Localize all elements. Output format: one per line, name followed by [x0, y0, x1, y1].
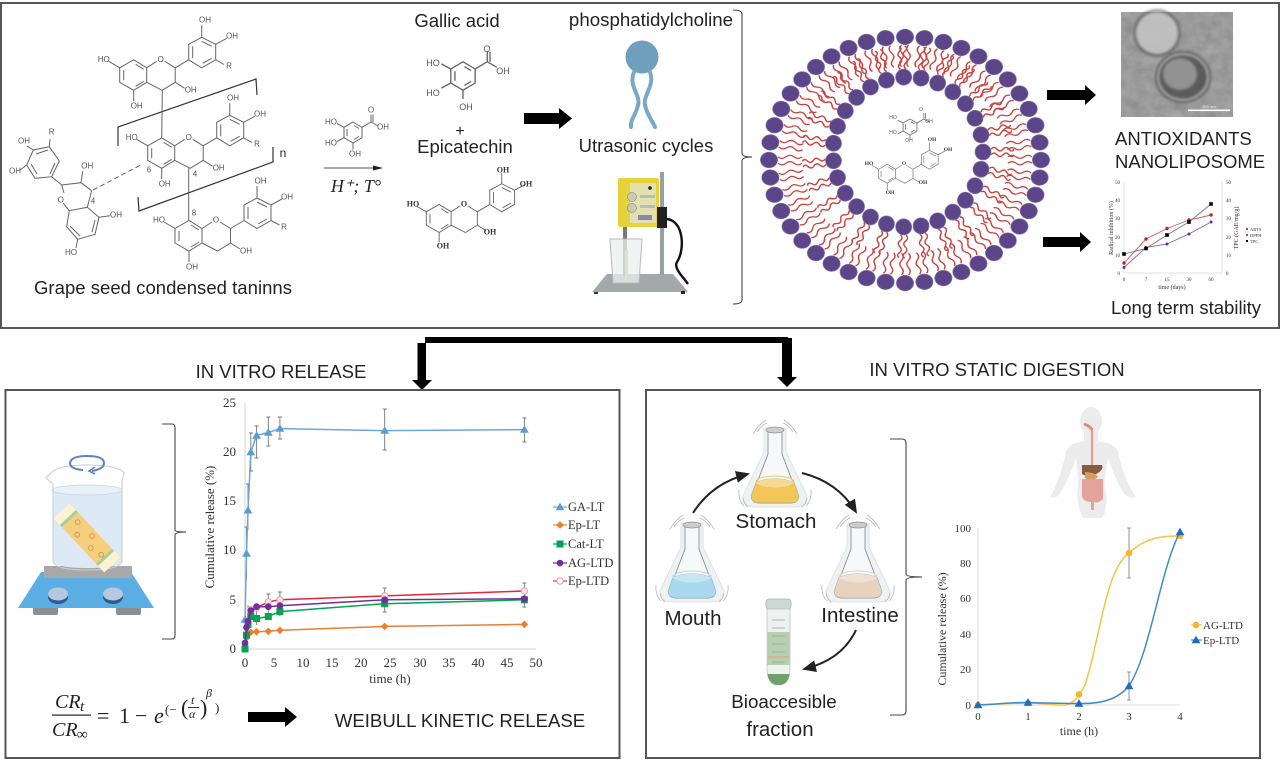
- outer phospholipid layer: [760, 29, 1050, 291]
- flavan unit bottom: OH: [186, 262, 198, 272]
- small gallic acid: HO: [325, 138, 337, 148]
- formula: Weibull equation: ): [215, 700, 219, 715]
- label: bioaccessible fraction: Bioaccesible: [731, 691, 837, 712]
- arrow: to Weibull kinetic: [248, 707, 297, 727]
- formula: Weibull equation: CR: [52, 719, 78, 741]
- small gallic acid: HO: [325, 118, 337, 126]
- legend: DPPH: [1250, 233, 1262, 238]
- flavan unit middle: OH: [227, 94, 239, 102]
- x axis labels: 25: [384, 655, 396, 670]
- flavan unit left: OH: [81, 162, 94, 170]
- structure: epicatechin: HO: [407, 200, 419, 208]
- y axis labels: 5: [230, 592, 236, 607]
- flavan unit middle: OH: [254, 110, 266, 118]
- right axis ticks: 30: [1226, 217, 1232, 222]
- formula: Weibull equation: CR: [55, 691, 81, 713]
- right axis ticks: [1226, 181, 1232, 277]
- chart: cumulative release: [202, 395, 613, 686]
- axis titles: time (h): [369, 671, 411, 686]
- formula: Weibull equation: e: [154, 703, 164, 728]
- encapsulated epicatechin: OH: [944, 147, 953, 153]
- axis titles: Cumulative release (%): [935, 572, 949, 686]
- series AG-LTD: [242, 595, 528, 646]
- encapsulated epicatechin: HO: [865, 161, 874, 167]
- legend: GA-LT: [568, 500, 605, 514]
- structure: epicatechin: OH: [520, 180, 533, 188]
- x axis ticks: 0: [1123, 278, 1126, 283]
- flavan unit left: O: [58, 196, 64, 204]
- structure: gallic acid: O: [483, 44, 491, 54]
- legend: Cat-LT: [568, 537, 604, 551]
- y axis labels: 25: [223, 395, 236, 410]
- axis titles: time (days): [1158, 284, 1186, 291]
- panel: in vitro static digestion: [646, 390, 1260, 758]
- y axis labels: 20: [960, 664, 972, 676]
- y axis labels: 10: [223, 542, 236, 557]
- legend: Ep-LTD: [568, 574, 609, 588]
- structure: gallic acid: HO: [426, 88, 440, 98]
- flavan unit middle: O: [186, 133, 192, 142]
- structure: gallic acid: OH: [459, 102, 473, 112]
- y axis labels: 40: [960, 629, 972, 641]
- x axis labels: [975, 711, 1183, 723]
- image: TEM micrograph: [1121, 9, 1233, 117]
- flavan unit middle: 6: [147, 166, 152, 174]
- encapsulated epicatechin: OH: [919, 180, 928, 186]
- axes: [245, 403, 536, 649]
- flavan unit middle: 4: [193, 170, 198, 178]
- illustration: dialysis bag on stirrer: [18, 456, 154, 615]
- formula: Weibull equation: −: [135, 703, 147, 728]
- label: bioaccessible fraction: fraction: [746, 718, 814, 741]
- y axis labels: 15: [223, 493, 236, 508]
- series Cat-LT: [242, 596, 528, 652]
- bracket: preparation: [733, 10, 752, 304]
- x axis labels: 35: [442, 655, 456, 670]
- flavan unit top: HO: [98, 55, 110, 64]
- x axis labels: 1: [1025, 711, 1031, 723]
- reaction conditions: H⁺; T°: [330, 176, 381, 196]
- left axis ticks: 50: [1115, 181, 1120, 186]
- encapsulated gallic acid: OH: [905, 138, 913, 144]
- axis titles: [202, 466, 411, 686]
- diagram: nanoliposome: [760, 29, 1050, 291]
- x axis ticks: 7: [1145, 278, 1148, 283]
- encapsulated gallic acid: O: [919, 107, 923, 113]
- x axis labels: 3: [1126, 711, 1132, 723]
- y axis labels: 80: [960, 558, 972, 570]
- title: antioxidants nanoliposome: NANOLIPOSOME: [1115, 151, 1265, 172]
- arrow: to micrograph: [1047, 85, 1096, 105]
- series AG-LTD: [975, 533, 1183, 708]
- arrow: stomach to intestine: [802, 473, 856, 512]
- heading: in vitro release: IN VITRO RELEASE: [196, 361, 366, 382]
- series DPPH: [1122, 213, 1213, 265]
- plus sign: +: [455, 123, 465, 140]
- y axis labels: 100: [954, 523, 972, 535]
- formula: Weibull equation: [52, 686, 219, 743]
- label: Weibull kinetic release: WEIBULL KINETIC RELEASE: [335, 710, 585, 731]
- flavan unit left: OH: [18, 136, 30, 146]
- series Ep-LT: [245, 621, 528, 649]
- flavan unit left: OH: [110, 210, 122, 220]
- formula: Weibull equation: β: [205, 686, 212, 700]
- legend: ABTS: [1250, 227, 1262, 232]
- series Ep-LTD: [245, 588, 528, 640]
- flavan unit left: 4: [91, 196, 96, 206]
- flask: stomach: [739, 420, 811, 507]
- icon: human digestive system: [1050, 407, 1136, 518]
- hot plate: [18, 566, 154, 615]
- flavan unit bottom: OH: [240, 246, 252, 256]
- formula: Weibull equation: ∞: [77, 727, 88, 743]
- encapsulated epicatechin: OH: [928, 137, 937, 143]
- legend: TPC: [1250, 239, 1258, 244]
- arrow: mouth to stomach: [693, 474, 748, 513]
- formula: Weibull equation: (−: [165, 702, 177, 717]
- small gallic acid: O: [368, 106, 374, 114]
- flavan unit middle: [126, 94, 266, 188]
- label: bioaccessible fraction: [731, 691, 837, 741]
- label: long term stability: Long term stability: [1111, 297, 1262, 318]
- formula: Weibull equation: α: [189, 707, 196, 721]
- flavan unit bottom: O: [213, 216, 219, 224]
- legend: AG-LTD: [1203, 620, 1243, 632]
- structure: epicatechin: OH: [484, 228, 497, 236]
- x axis ticks: 15: [1164, 278, 1170, 283]
- flavan unit left: HO: [65, 248, 77, 257]
- legend: [1246, 227, 1262, 244]
- y axis labels: 20: [223, 444, 236, 459]
- small gallic acid: [325, 106, 389, 158]
- bracket: release setup: [162, 424, 186, 639]
- formula: Weibull equation: (: [181, 695, 188, 720]
- series Ep-LTD: [974, 528, 1184, 708]
- label: intestine: Intestine: [821, 604, 899, 627]
- arrow: intestine to tube: [804, 630, 856, 669]
- x axis labels: 15: [326, 655, 338, 670]
- image: TEM micrograph: 200 nm: [1202, 104, 1216, 109]
- error bars: [1127, 528, 1131, 700]
- flavan unit middle: HO: [126, 133, 138, 142]
- left axis ticks: 20: [1115, 236, 1120, 241]
- reaction with gallic acid: [324, 106, 389, 196]
- y axis labels: [223, 395, 236, 656]
- structure: gallic acid: OH: [496, 66, 510, 76]
- flask: intestine: [822, 515, 894, 602]
- heading: ultrasonic cycles: Utrasonic cycles: [579, 135, 713, 156]
- legend: AG-LTD: [568, 556, 613, 570]
- x axis ticks: 60: [1208, 278, 1214, 283]
- x axis labels: 30: [414, 655, 426, 670]
- x axis ticks: 30: [1186, 278, 1192, 283]
- encapsulated gallic acid: HO: [889, 115, 897, 121]
- flavan unit bottom: R: [281, 222, 287, 232]
- axis titles: Radical inhibition (%): [1108, 201, 1115, 255]
- chemical structure: grape seed condensed tannins: [9, 16, 293, 272]
- x axis labels: 0: [975, 711, 981, 723]
- axis titles: Cumulative release (%): [202, 466, 217, 588]
- flavan unit bottom: OH: [281, 192, 293, 202]
- axes: [978, 528, 1180, 705]
- encapsulated gallic acid: HO: [889, 130, 897, 136]
- flavan unit bottom: OH: [254, 176, 267, 186]
- left axis ticks: 30: [1115, 217, 1120, 222]
- x axis ticks: [1123, 278, 1214, 283]
- series TPC: [1122, 202, 1213, 256]
- icon: phospholipid: [626, 40, 658, 127]
- right axis ticks: 50: [1226, 181, 1232, 186]
- inner phospholipid layer: [802, 46, 1014, 258]
- legend: Ep-LT: [568, 518, 601, 532]
- flavan unit bottom: [153, 176, 293, 272]
- flavan unit left: OH: [9, 166, 21, 176]
- left axis ticks: 40: [1115, 199, 1120, 204]
- encapsulated gallic acid: [889, 107, 933, 144]
- structure: gallic acid: HO: [426, 58, 440, 68]
- axis titles: [935, 572, 1098, 738]
- label: grape seed condensed tannins: Grape seed condensed taninns: [34, 277, 292, 298]
- arrow: to stability chart: [1043, 232, 1091, 252]
- small gallic acid: OH: [377, 122, 389, 132]
- axis titles: TPC (GAE/mg/g): [1233, 207, 1240, 249]
- flavan unit top: R: [226, 62, 232, 70]
- encapsulated epicatechin: [865, 137, 953, 196]
- x axis labels: 2: [1076, 711, 1082, 723]
- title: antioxidants nanoliposome: [1115, 128, 1265, 172]
- right axis ticks: 20: [1226, 236, 1232, 241]
- formula: Weibull equation: ): [200, 695, 207, 720]
- x axis labels: 4: [1177, 711, 1183, 723]
- label: mouth: Mouth: [665, 607, 721, 630]
- legend: [553, 500, 613, 588]
- connector: arrows to the assays: [412, 337, 797, 390]
- x axis labels: [242, 655, 542, 670]
- y axis labels: 0: [966, 700, 972, 712]
- flavan unit middle: R: [254, 140, 260, 148]
- chart: digestion cumulative release: [935, 523, 1243, 738]
- error bars: [244, 409, 526, 640]
- arrow: to liposome components: [524, 108, 572, 129]
- series GA-LT: [241, 424, 529, 623]
- formula: Weibull equation: t: [80, 699, 85, 715]
- flavan unit top: OH: [185, 86, 197, 94]
- small gallic acid: OH: [349, 150, 361, 158]
- formula: Weibull equation: 1: [119, 703, 130, 728]
- icon: sonicator: [592, 172, 688, 294]
- heading: gallic acid: Gallic acid: [414, 10, 500, 31]
- flavan unit bottom: HO: [153, 216, 165, 224]
- left axis ticks: 0: [1118, 272, 1120, 277]
- encapsulated epicatechin: OH: [886, 190, 895, 196]
- right axis ticks: 40: [1226, 199, 1232, 204]
- flavan unit top: OH: [199, 16, 211, 24]
- formula: Weibull equation: t: [191, 693, 195, 707]
- right axis ticks: 10: [1226, 254, 1232, 259]
- flavan unit bottom: 8: [192, 208, 197, 218]
- inter-unit bonds and polymer bracket: [118, 79, 286, 220]
- y axis labels: [954, 523, 972, 712]
- x axis labels: 5: [271, 655, 277, 670]
- label: stomach: Stomach: [736, 510, 816, 533]
- structure: gallic acid: [426, 44, 510, 112]
- left axis ticks: 10: [1115, 254, 1120, 259]
- structure: epicatechin: [407, 166, 533, 250]
- digestion cycle diagram: [656, 420, 899, 741]
- inter-unit bonds and polymer bracket: n: [280, 146, 286, 160]
- rotation arrow: [70, 456, 104, 474]
- flavan unit top: [98, 16, 238, 110]
- flavan unit top: O: [158, 55, 164, 64]
- structure: epicatechin: O: [461, 200, 467, 208]
- axis titles: time (h): [1060, 724, 1098, 738]
- x axis labels: 50: [530, 655, 542, 670]
- encapsulated gallic acid: OH: [925, 119, 933, 125]
- flavan unit middle: OH: [213, 164, 225, 172]
- x axis labels: 0: [242, 655, 248, 670]
- reaction arrow: [324, 166, 383, 170]
- heading: phosphatidylcholine: phosphatidylcholine: [569, 9, 733, 30]
- y axis labels: 0: [230, 641, 236, 656]
- flavan unit left: [9, 128, 143, 257]
- title: antioxidants nanoliposome: ANTIOXIDANTS: [1115, 128, 1252, 149]
- y axis labels: 60: [960, 593, 972, 605]
- panel: nanoliposome preparation: [1, 3, 1279, 328]
- flavan unit middle: OH: [159, 180, 171, 188]
- x axis labels: 10: [296, 655, 310, 670]
- encapsulated epicatechin: O: [902, 161, 907, 167]
- structure: epicatechin: OH: [437, 242, 450, 250]
- chart: long term stability: [1108, 181, 1262, 291]
- heading: in vitro static digestion: IN VITRO STATIC DIGESTION: [869, 359, 1125, 380]
- flavan unit top: OH: [226, 32, 238, 40]
- flask: mouth: [656, 515, 728, 602]
- flavan unit top: OH: [131, 102, 143, 110]
- right axis ticks: 0: [1226, 272, 1229, 277]
- panel: in vitro release: [6, 390, 620, 758]
- x axis labels: 20: [354, 655, 368, 670]
- dialysis bag: [54, 503, 120, 573]
- left axis ticks: [1115, 181, 1120, 277]
- bracket: digestion: [890, 439, 922, 715]
- structure: epicatechin: OH: [497, 166, 510, 174]
- flavan unit left: R: [49, 128, 55, 136]
- beaker: [46, 465, 124, 570]
- series ABTS: [1122, 220, 1212, 269]
- axis titles: [1108, 201, 1240, 291]
- icon: centrifuge tube: [766, 599, 791, 685]
- legend: [1191, 620, 1243, 647]
- heading: epicatechin: Epicatechin: [417, 136, 513, 157]
- x axis labels: 45: [500, 655, 514, 670]
- legend: Ep-LTD: [1203, 635, 1239, 647]
- formula: Weibull equation: =: [97, 703, 109, 728]
- x axis labels: 40: [472, 655, 484, 670]
